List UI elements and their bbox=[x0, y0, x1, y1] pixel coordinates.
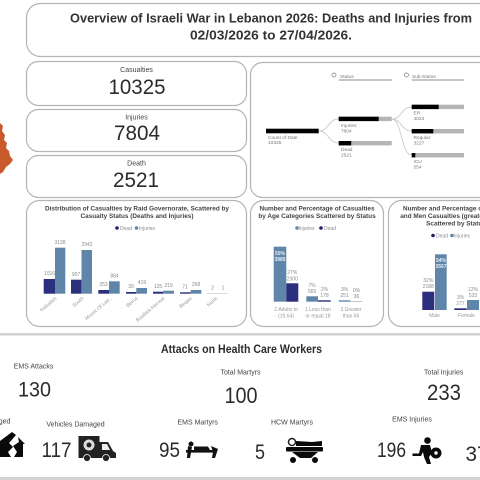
icon: person on stretcher bbox=[186, 442, 218, 458]
stat: total martyrs: 100 bbox=[224, 383, 258, 408]
icon: broken house bbox=[0, 432, 25, 457]
tree level headers: Sub-Status bbox=[412, 74, 436, 80]
card: death: 2521 bbox=[113, 169, 159, 192]
title panel: Overview of Israeli War in Lebanon 2026: Deaths and Injuries from bbox=[70, 10, 472, 26]
tree node: ICU: ICU bbox=[414, 159, 422, 165]
value labels: 268 bbox=[192, 282, 200, 288]
value labels: 3567 bbox=[435, 264, 447, 270]
value labels: 419 bbox=[138, 280, 146, 286]
title panel bbox=[26, 4, 480, 56]
legend: Dead bbox=[120, 226, 132, 232]
stat: EMS martyrs: EMS Martyrs bbox=[177, 420, 218, 426]
value labels: 36 bbox=[354, 294, 359, 300]
category labels: Female bbox=[458, 313, 475, 319]
card: casualties: Casualties bbox=[120, 67, 153, 74]
value labels: 2 bbox=[211, 286, 214, 292]
value labels: 3% bbox=[341, 287, 349, 293]
tree node: ICU: 554 bbox=[414, 164, 422, 170]
tree node: ER: 4023 bbox=[414, 116, 425, 122]
stat: HCW martyrs: 5 bbox=[255, 441, 265, 464]
value labels: 7% bbox=[308, 283, 316, 289]
tree node: dead: Dead bbox=[341, 147, 353, 153]
value labels: 178 bbox=[320, 293, 329, 299]
value labels: 2300 bbox=[287, 276, 298, 282]
tree node: ICU bbox=[412, 153, 464, 170]
card: injuries bbox=[26, 110, 246, 152]
bars bbox=[274, 247, 362, 302]
tree node: ER bbox=[412, 105, 464, 122]
bars bbox=[44, 248, 228, 294]
value labels: 907 bbox=[72, 272, 80, 278]
stat: total martyrs bbox=[220, 370, 261, 408]
bars bbox=[422, 254, 479, 310]
value labels: 3985 bbox=[274, 257, 286, 263]
stat: EMS injuries: EMS Injuries bbox=[392, 416, 432, 424]
tree node: regular: 3227 bbox=[414, 140, 425, 146]
panel: casualties by age chart bbox=[250, 200, 384, 326]
tree level headers: Status bbox=[340, 74, 354, 80]
legend: Dead bbox=[436, 233, 448, 239]
panel: women and men casualties chart bbox=[388, 200, 480, 326]
legend bbox=[295, 226, 336, 232]
tree node: injuries: 7804 bbox=[341, 128, 352, 134]
category labels bbox=[39, 296, 219, 324]
tree node: dead bbox=[339, 141, 392, 158]
stat: total injuries bbox=[424, 370, 464, 405]
tree node: count of date: 10325 bbox=[268, 140, 282, 146]
category labels: Nabatieh bbox=[39, 296, 58, 313]
value labels: 3% bbox=[457, 295, 465, 301]
chart title: Casualty Status (Deaths and Injuries) bbox=[81, 213, 193, 220]
value labels: 12% bbox=[468, 287, 479, 293]
stat: EMS attacks bbox=[14, 364, 54, 402]
icon: hospital bed bbox=[286, 438, 323, 463]
legend: Injuries bbox=[454, 233, 471, 239]
legend: Dead bbox=[324, 226, 336, 232]
value labels: 253 bbox=[99, 282, 108, 288]
tree node: count of date: Count of Date bbox=[268, 135, 298, 141]
stat: total martyrs: Total Martyrs bbox=[220, 370, 261, 376]
tree node: regular bbox=[412, 129, 464, 146]
value labels: 32% bbox=[423, 278, 434, 284]
tree level headers bbox=[332, 73, 464, 80]
value labels: 3128 bbox=[54, 240, 66, 246]
title panel: 02/03/2026 to 27/04/2026. bbox=[190, 28, 352, 42]
icon: running paramedic bbox=[412, 437, 442, 464]
stat: EMS injuries: 196 bbox=[377, 439, 406, 462]
category labels: Beqaa bbox=[178, 296, 193, 310]
card: casualties bbox=[26, 62, 246, 106]
legend bbox=[431, 233, 471, 239]
category labels: or equal 18 bbox=[305, 314, 331, 320]
value labels: 50% bbox=[275, 251, 286, 257]
value labels bbox=[274, 251, 361, 300]
category labels: 3.Greater bbox=[340, 307, 362, 313]
category labels: North bbox=[206, 296, 219, 308]
value labels bbox=[44, 240, 225, 292]
chart title: Distribution of Casualties by Raid Governorate, Scattered by bbox=[45, 206, 229, 212]
value labels: 219 bbox=[164, 283, 173, 289]
stat: EMS martyrs: 95 bbox=[159, 439, 180, 462]
value labels: 277 bbox=[456, 301, 465, 307]
value labels: 884 bbox=[110, 274, 119, 280]
stat: EMS injuries bbox=[377, 416, 432, 462]
value labels: 1 bbox=[222, 286, 225, 292]
stat: EMS martyrs bbox=[159, 420, 218, 462]
value labels: 125 bbox=[154, 284, 162, 290]
tree node: count of date bbox=[266, 129, 319, 146]
divider bands bbox=[0, 333, 480, 336]
card: injuries: 7804 bbox=[114, 122, 160, 145]
stat: vehicles damaged: Vehicles Damaged bbox=[46, 422, 105, 428]
card: death: Death bbox=[127, 160, 146, 168]
value labels bbox=[423, 258, 479, 307]
stat: HCW martyrs: HCW Martyrs bbox=[271, 420, 313, 426]
legend: Injuries bbox=[139, 226, 156, 232]
chart title: Number and Percentage of Casualties bbox=[259, 206, 375, 212]
legend bbox=[115, 226, 156, 232]
tree node: injuries bbox=[339, 117, 392, 134]
category labels bbox=[429, 313, 475, 319]
card: injuries: Injuries bbox=[125, 114, 148, 122]
value labels: 2942 bbox=[81, 242, 93, 248]
chart title: by Age Categories Scattered by Status bbox=[258, 213, 376, 220]
category labels: 2.Adults to bbox=[274, 307, 298, 313]
map of Lebanon (cropped) bbox=[0, 123, 13, 174]
tree node: dead: 2521 bbox=[341, 152, 352, 158]
card: death bbox=[26, 156, 246, 198]
value labels: 39 bbox=[128, 284, 134, 290]
value labels: 2188 bbox=[423, 284, 434, 290]
category labels: than 65 bbox=[343, 314, 360, 320]
stat: HCW martyrs bbox=[255, 420, 313, 464]
stat: total injuries: Total Injuries bbox=[424, 370, 464, 376]
icon: ambulance bbox=[78, 436, 116, 462]
value labels: 0% bbox=[353, 288, 361, 294]
stat: EMS attacks: 130 bbox=[18, 378, 51, 402]
value labels: 533 bbox=[469, 293, 477, 299]
tree node: regular: Regular bbox=[414, 135, 431, 141]
stat: total injuries: 233 bbox=[427, 380, 461, 405]
stat: EMS attacks: EMS Attacks bbox=[14, 364, 54, 370]
category labels: Beirut bbox=[125, 296, 140, 309]
value labels: 27% bbox=[287, 270, 298, 276]
value labels: 71 bbox=[182, 284, 188, 290]
tree node: ER: ER bbox=[414, 110, 421, 116]
heading: attacks on health care workers: Attacks on Health Care Workers bbox=[161, 344, 322, 356]
value labels: 251 bbox=[340, 293, 349, 299]
category labels: 1.Less than bbox=[305, 307, 331, 313]
value labels: 1016 bbox=[44, 271, 55, 277]
stat: vehicles damaged bbox=[42, 422, 105, 462]
category labels: Mount Of Leb.. bbox=[84, 296, 113, 322]
value labels: 2% bbox=[321, 287, 329, 293]
category labels: Baalbek-Hermel bbox=[135, 296, 166, 324]
card: casualties: 10325 bbox=[108, 76, 166, 99]
legend: Injuries bbox=[298, 226, 315, 232]
category labels: South bbox=[71, 296, 85, 309]
category labels: Male bbox=[429, 313, 440, 319]
value labels: 569 bbox=[308, 289, 316, 295]
panel: casualties by governorate chart bbox=[26, 200, 246, 326]
tree node: injuries: Injuries bbox=[341, 123, 357, 129]
tree connectors bbox=[319, 107, 412, 155]
panel: decomposition tree bbox=[250, 62, 480, 198]
value labels: 54% bbox=[436, 258, 447, 264]
stat: vehicles damaged: 117 bbox=[42, 439, 72, 462]
category labels bbox=[274, 307, 362, 320]
category labels: (19,64) bbox=[278, 314, 294, 320]
